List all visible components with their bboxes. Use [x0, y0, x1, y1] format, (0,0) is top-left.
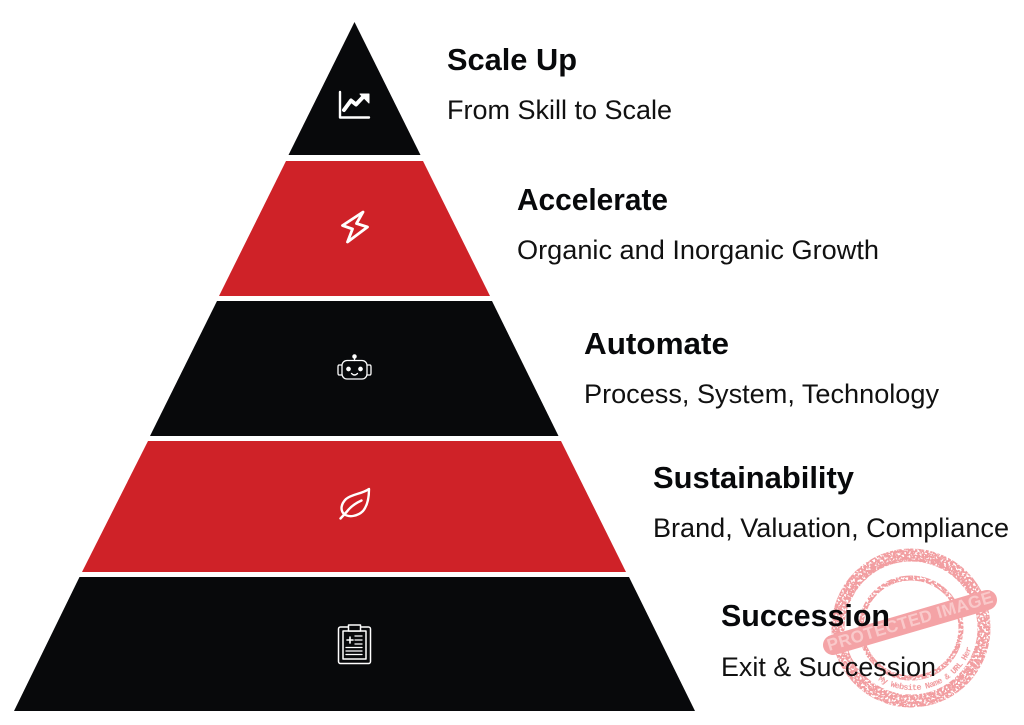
text block: Sustainability: [653, 460, 1009, 543]
level 1: Scale Up tier: [288, 22, 420, 155]
level 4: Sustainability tier: [82, 441, 626, 572]
text block: Accelerate: [517, 182, 879, 265]
subheading: Brand, Valuation, Compliance: [653, 513, 1009, 543]
heading: Scale Up: [447, 42, 577, 77]
text block: Scale Up: [447, 42, 672, 125]
stamp: protected image watermark: My Website Name & URL Here: [878, 646, 970, 690]
icon: growth chart: [340, 92, 369, 118]
level 3: Automate tier: [150, 301, 558, 436]
text block: Succession: [721, 598, 936, 682]
subheading: From Skill to Scale: [447, 95, 672, 125]
level 2: Accelerate tier: [219, 161, 490, 296]
icon: robot head: [338, 355, 371, 379]
icon: clipboard: [338, 625, 370, 664]
level 5: Succession tier: [14, 577, 695, 711]
subheading: Exit & Succession: [721, 652, 936, 682]
heading: Succession: [721, 598, 890, 633]
panel: pyramid: [14, 22, 695, 711]
text block: Automate: [584, 326, 939, 409]
icon: leaf: [340, 489, 369, 518]
icon: lightning bolt: [342, 212, 368, 242]
subheading: Process, System, Technology: [584, 379, 939, 409]
heading: Automate: [584, 326, 729, 361]
heading: Accelerate: [517, 182, 668, 217]
subheading: Organic and Inorganic Growth: [517, 235, 879, 265]
heading: Sustainability: [653, 460, 855, 495]
stamp: protected image watermark: TENT COPY PROTECTION PLUGIN: [844, 555, 970, 602]
stamp: protected image watermark: PROTECTED IMAGE: [825, 588, 995, 655]
